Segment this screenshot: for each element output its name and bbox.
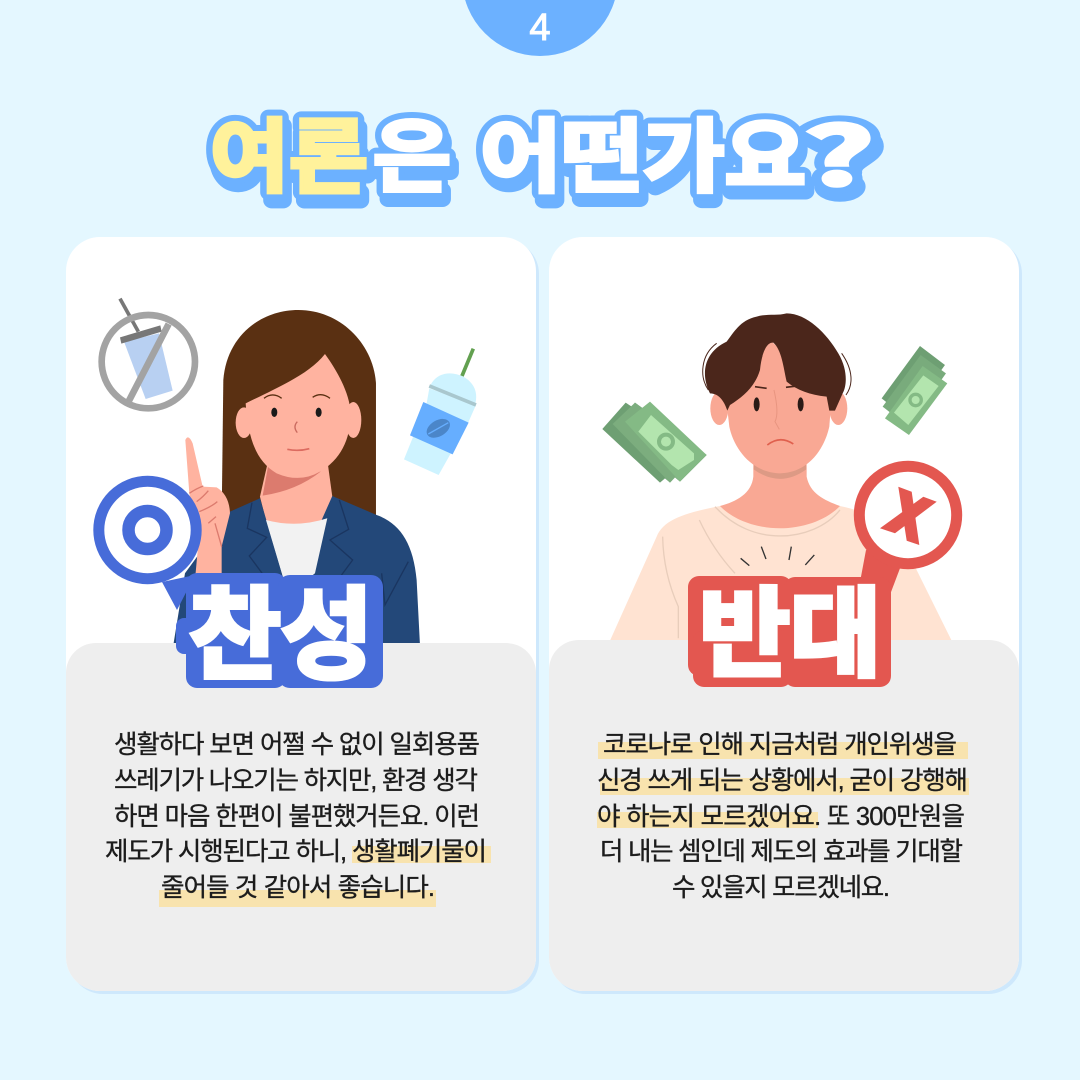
title: 여론 <box>210 93 368 209</box>
icon: blue coffee cup <box>404 349 476 475</box>
text block: opposing opinion <box>597 731 969 902</box>
label: 찬성: 찬성 <box>189 554 373 699</box>
icon: crossed-out plastic cup <box>102 299 195 408</box>
text block: opposing opinion: 신경 쓰게 되는 상황에서, 굳이 강행해 <box>597 767 968 795</box>
text block: supporting opinion: 생활하다 보면 어쩔 수 없이 일회용품 <box>114 731 480 759</box>
page number badge: 4 <box>529 7 551 49</box>
title: 어떤가요 <box>480 93 806 209</box>
page number badge <box>462 0 618 56</box>
title: 어떤가요 <box>480 93 806 209</box>
text block: opposing opinion: 수 있을지 모르겠네요. <box>672 874 890 902</box>
title <box>210 93 877 217</box>
title: 여론 <box>213 101 371 217</box>
panel: left opinion background <box>66 643 536 991</box>
text block: opposing opinion: 코로나로 인해 지금처럼 개인위생을 <box>603 731 957 759</box>
panel: right card <box>549 237 1022 994</box>
text block: supporting opinion: 제도가 시행된다고 하니, 생활폐기물이 <box>105 838 487 866</box>
icon: green bills right <box>882 346 947 435</box>
icon: circle sign <box>99 481 196 610</box>
illustration: worried man <box>610 313 952 641</box>
text block: opposing opinion: 더 내는 셈인데 제도의 효과를 기대할 <box>600 838 963 866</box>
icon: X sign <box>859 466 957 600</box>
title: 은 <box>376 101 454 217</box>
panel: right opinion background <box>549 640 1019 991</box>
title: ? <box>804 93 874 209</box>
title: 은 <box>373 93 451 209</box>
title: ? <box>804 93 874 209</box>
title: 어떤가요 <box>483 101 809 217</box>
text block: supporting opinion <box>105 731 491 907</box>
title: 은 <box>373 93 451 209</box>
title: ? <box>807 101 877 217</box>
panel: left card <box>66 237 539 994</box>
label: 반대: 반대 <box>699 555 881 696</box>
illustration: woman pointing <box>173 310 420 645</box>
text block: supporting opinion: 쓰레기가 나오기는 하지만, 환경 생각 <box>114 767 478 795</box>
text block: opposing opinion: 야 하는지 모르겠어요. 또 300만원을 <box>597 803 965 831</box>
text block: supporting opinion: 하면 마음 한편이 불편했거든요. 이런 <box>114 803 480 831</box>
icon: green bills left <box>602 402 707 483</box>
title: 여론 <box>210 93 368 209</box>
text block: supporting opinion: 줄어들 것 같아서 좋습니다. <box>161 874 435 902</box>
